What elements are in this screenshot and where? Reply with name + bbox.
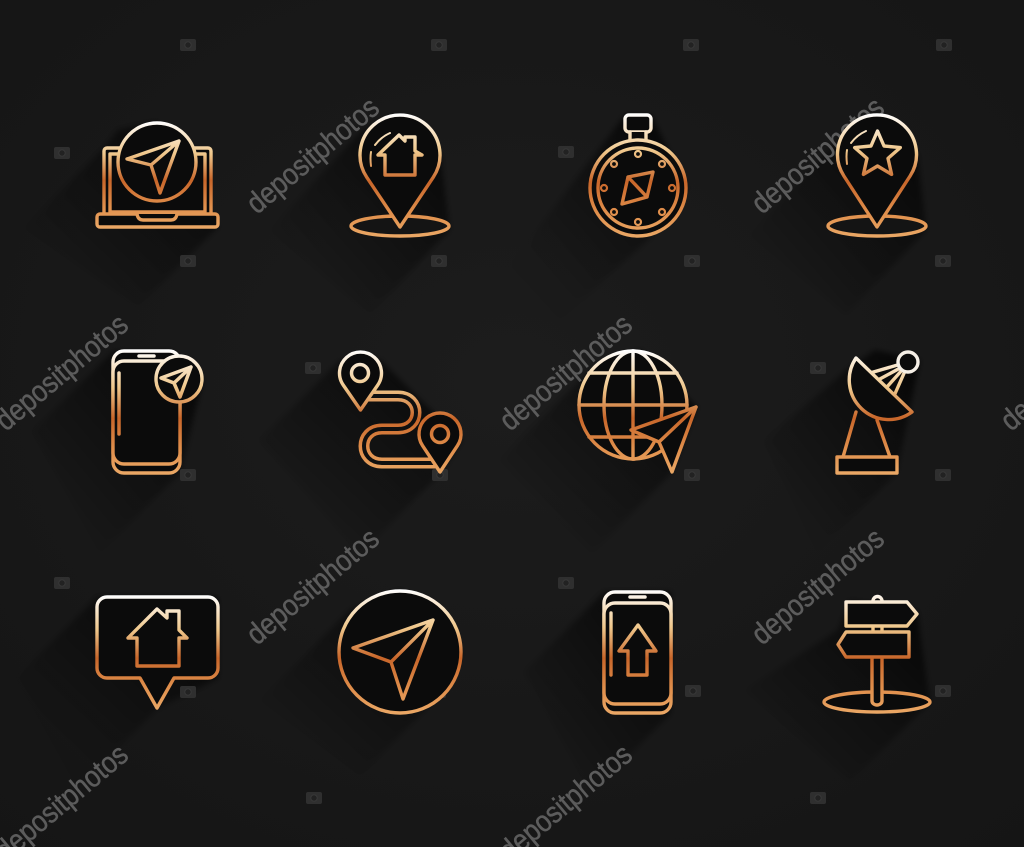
icon: map pin with house [351,115,449,236]
icon: laptop with navigation arrow [97,123,218,227]
icon: satellite dish [837,352,918,473]
icon: smartphone with up arrow [604,592,671,713]
icon: map pin with star [828,115,926,236]
icon: navigation arrow in circle [339,591,461,713]
icon shadows [17,114,930,793]
watermark: depositphotos repeated: depositphotos [745,91,891,220]
icon: route between two pins [340,352,461,472]
icon: smartphone with navigation badge [113,351,202,473]
watermark: depositphotos repeated: depositphotos [240,522,386,651]
watermark: depositphotos repeated: depositphotos [240,91,386,220]
icon: globe with paper plane [579,351,696,472]
icon: speech bubble with house [97,597,218,708]
watermark: depositphotos repeated: depositphotos [493,308,639,437]
icon: signpost [824,596,930,712]
watermark: depositphotos repeated: depositphotos [745,522,891,651]
icon: compass [590,115,686,236]
watermark camera marks [54,39,952,804]
